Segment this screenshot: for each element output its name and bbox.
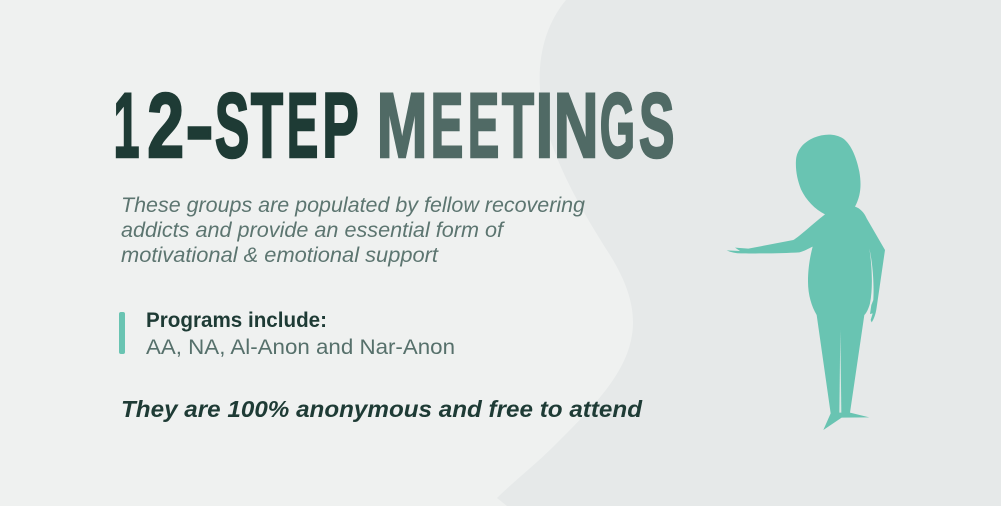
title part: MEETINGS: G bbox=[600, 75, 635, 177]
title part: 12-STEP bbox=[114, 75, 359, 177]
title part: MEETINGS: T bbox=[502, 75, 534, 177]
programs heading: Programs include: bbox=[146, 309, 327, 332]
description text: addicts and provide an essential form of bbox=[121, 219, 505, 242]
title part: MEETINGS: E bbox=[431, 75, 463, 177]
title part: MEETINGS: N bbox=[554, 75, 598, 177]
description text: These groups are populated by fellow recovering bbox=[121, 194, 585, 217]
title part: MEETINGS: E bbox=[468, 75, 499, 177]
title part: 12-STEP: - bbox=[186, 75, 214, 177]
title part: 12-STEP: 1 bbox=[114, 75, 140, 177]
icon: standing figure with outstretched arm bbox=[727, 135, 885, 430]
closing statement: They are 100% anonymous and free to attend bbox=[121, 396, 643, 422]
programs list: AA, NA, Al-Anon and Nar-Anon bbox=[146, 336, 455, 359]
title part: 12-STEP: S bbox=[215, 75, 249, 177]
leg gap bbox=[839, 330, 841, 413]
title part: 12-STEP: T bbox=[251, 75, 283, 177]
title part: MEETINGS bbox=[377, 75, 674, 177]
title part: MEETINGS: M bbox=[377, 75, 427, 177]
background curved shape bbox=[497, 0, 1001, 506]
title bbox=[114, 75, 674, 177]
title part: MEETINGS: S bbox=[639, 75, 674, 177]
description text: motivational & emotional support bbox=[121, 244, 439, 267]
title part: 12-STEP: 2 bbox=[147, 75, 184, 177]
description text bbox=[121, 194, 585, 267]
title part: 12-STEP: P bbox=[322, 75, 359, 177]
title part: 12-STEP: E bbox=[287, 75, 318, 177]
accent bar bbox=[119, 312, 125, 354]
title part: MEETINGS: I bbox=[536, 75, 553, 177]
